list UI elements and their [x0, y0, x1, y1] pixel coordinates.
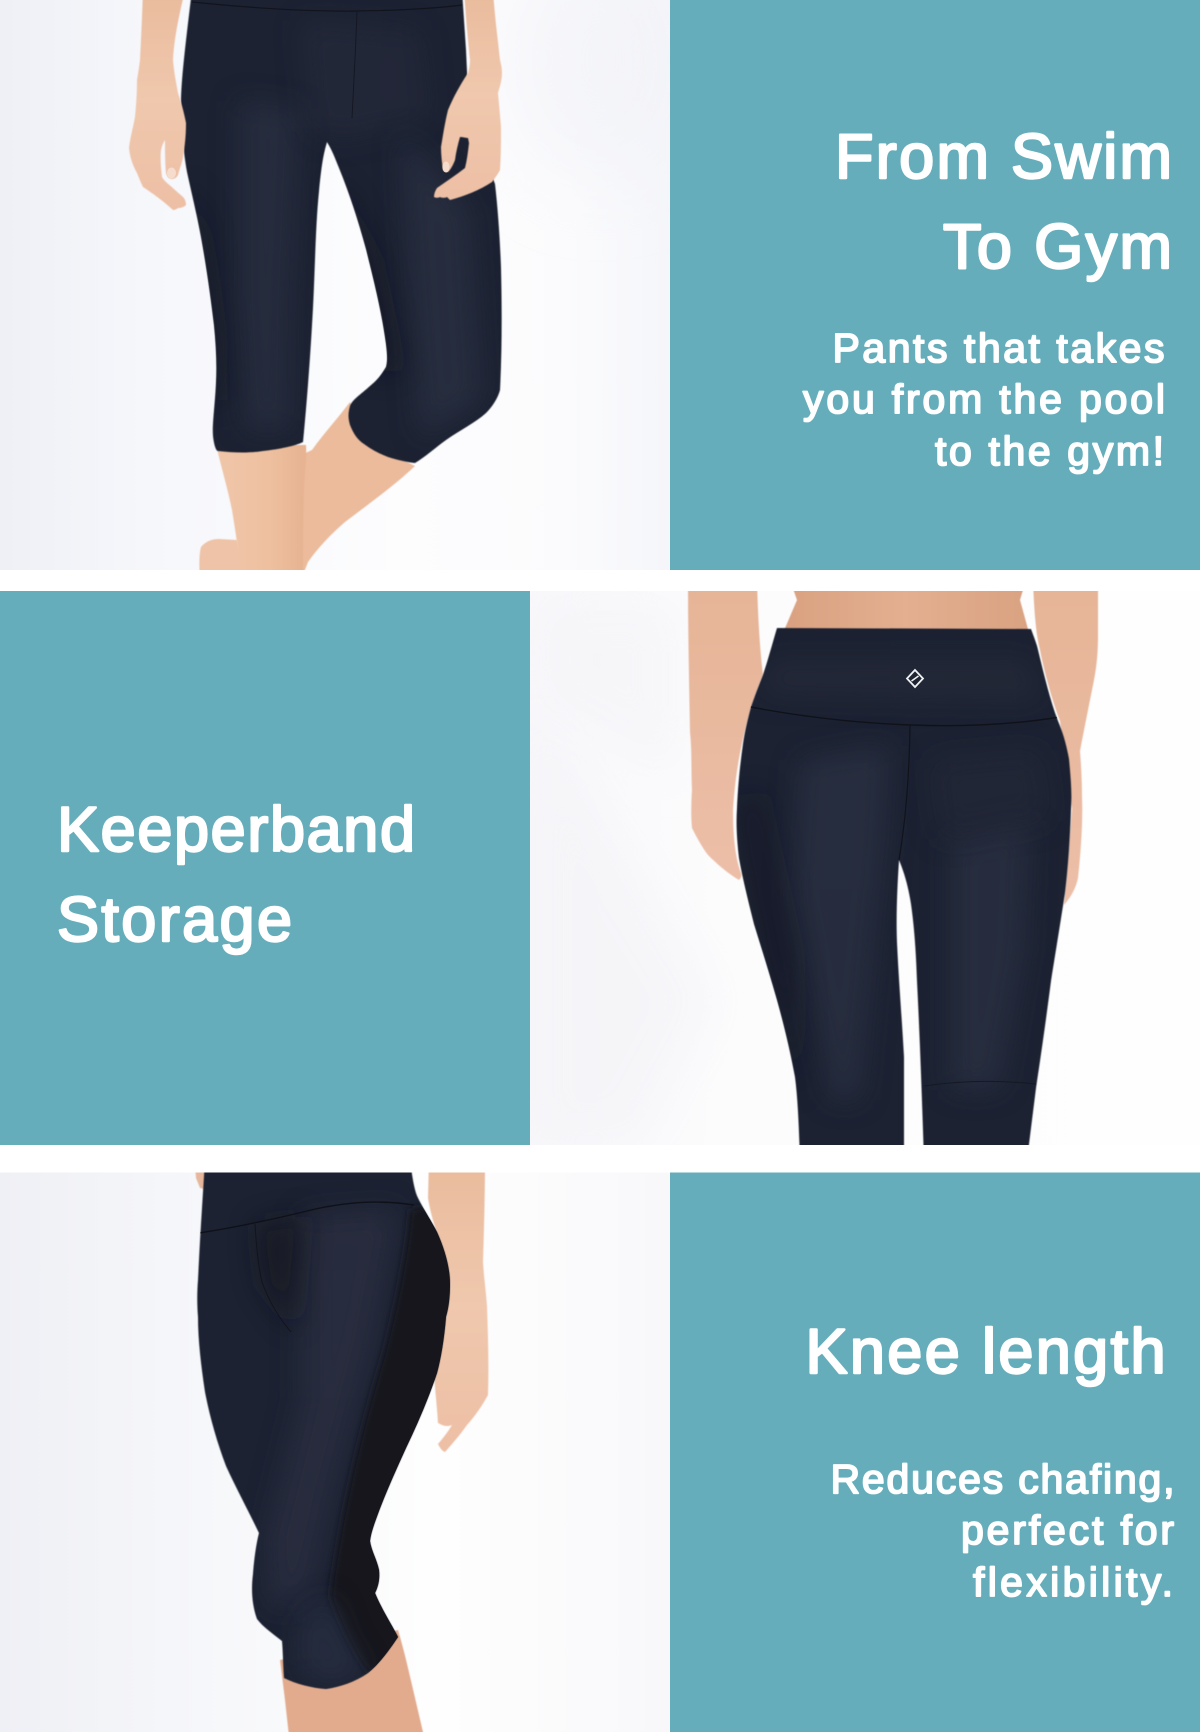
leggings, side view: [197, 1160, 460, 1689]
left arm and hand: [688, 580, 763, 880]
text: pants description: Pants that takes: [832, 325, 1164, 371]
heading: Keeperband Storage: [57, 795, 415, 955]
heading: From Swim To Gym: [835, 122, 1172, 282]
icon: diamond logo on waistband: [907, 670, 923, 687]
lower leg skin: [280, 1630, 426, 1733]
torso skin: [784, 591, 1028, 630]
text: pants description: [803, 325, 1165, 474]
fingernail: [442, 162, 450, 172]
panel: heading and text, from swim to gym: [670, 0, 1200, 570]
panel: back view photo of pants: [530, 591, 1099, 1145]
panel: front view photo of capri pants: [0, 0, 690, 580]
text: chafing and flexibility description: flexibility.: [973, 1559, 1173, 1605]
right arm and hand: [434, 0, 502, 200]
right arm and hand: [1033, 580, 1098, 905]
panel: side view photo of pants: [0, 1172, 489, 1732]
heading: Keeperband Storage: Keeperband: [57, 795, 415, 865]
hand behind hip: [195, 1172, 205, 1190]
panel: knee length heading and text: [670, 1172, 1200, 1732]
text: pants description: to the gym!: [935, 428, 1164, 474]
leggings, back view: [735, 628, 1071, 1160]
left arm and hand: [129, 0, 186, 210]
panel: keeperband storage heading: [0, 591, 530, 1145]
back leg skin: [302, 402, 416, 570]
text: chafing and flexibility description: [830, 1456, 1174, 1605]
fingernail: [167, 168, 176, 178]
foot skin: [198, 538, 241, 570]
front lower leg skin: [216, 445, 306, 580]
right arm and hand: [428, 1160, 488, 1452]
heading: From Swim To Gym: From Swim: [835, 122, 1172, 192]
heading: Knee length: Knee length: [806, 1317, 1166, 1387]
heading: From Swim To Gym: To Gym: [943, 212, 1172, 282]
text: pants description: you from the pool: [803, 376, 1165, 422]
text: chafing and flexibility description: Reduces chafing,: [830, 1456, 1174, 1502]
text: chafing and flexibility description: perfect for: [961, 1507, 1174, 1553]
leggings, front view: [181, 0, 502, 463]
heading: Keeperband Storage: Storage: [57, 885, 292, 955]
